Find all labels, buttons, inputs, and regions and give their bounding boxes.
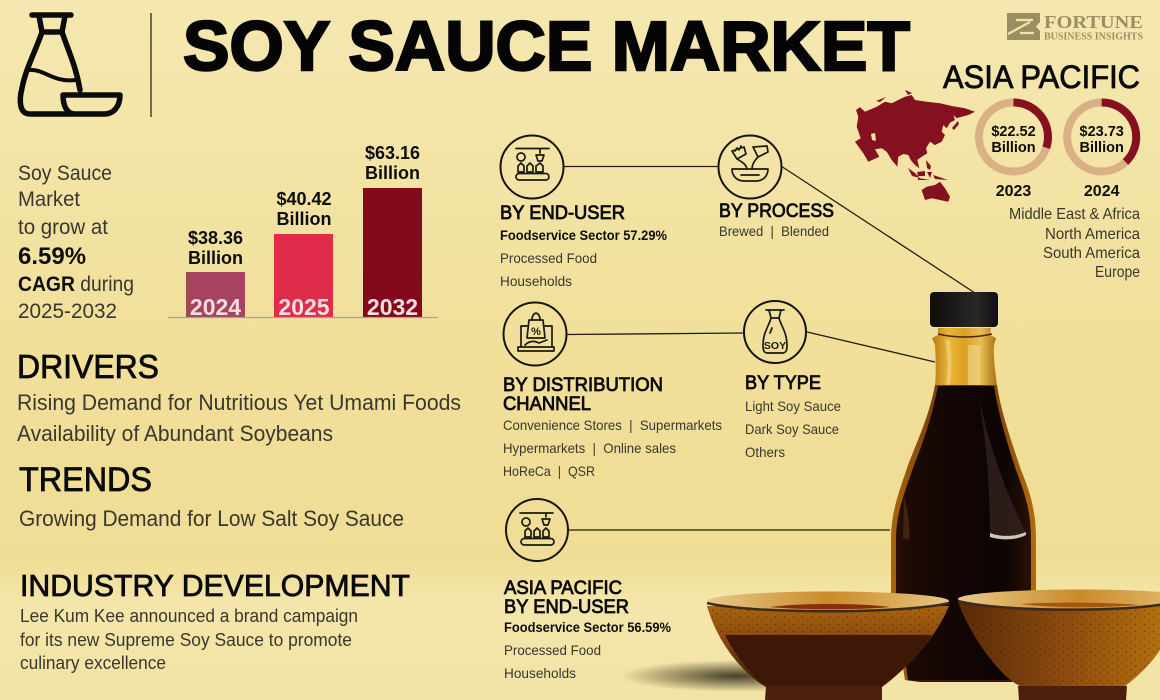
icon: by distribution channel — [504, 302, 566, 366]
block: by end-user: Foodservice Sector 57.29% — [500, 228, 667, 243]
text: other regions: Middle East & Africa — [1009, 206, 1140, 223]
bar chart: market size: Billion — [188, 248, 243, 268]
block: by distribution channel — [503, 374, 722, 479]
bar chart: market size: $38.36 — [188, 228, 243, 248]
icon: by end-user — [500, 136, 564, 198]
icon: by type — [744, 301, 806, 363]
section: trends — [19, 461, 404, 531]
logo: Fortune Business Insights: FORTUNE — [1044, 12, 1143, 32]
bar chart: market size: Billion — [276, 209, 332, 229]
text: market growth: CAGR during — [18, 273, 134, 296]
section: trends: Growing Demand for Low Salt Soy Sauce — [19, 506, 404, 531]
logo: Fortune Business Insights: BUSINESS INSIGHTS — [1044, 32, 1143, 42]
donut: 2023 — [979, 102, 1048, 200]
section: industry development: culinary excellence — [20, 653, 166, 673]
connector lines — [564, 166, 975, 530]
block: by distribution channel: CHANNEL — [503, 393, 591, 415]
bar chart: market size: 2024 — [190, 294, 241, 320]
text: other regions: South America — [1043, 245, 1140, 262]
donut: 2023: Billion — [991, 140, 1036, 156]
donut: 2023: $22.52 — [991, 124, 1036, 140]
block: by type: Dark Soy Sauce — [745, 421, 839, 437]
icon: by distribution channel: % — [531, 326, 541, 338]
soy sauce bottle — [891, 292, 1036, 682]
ground shadow — [620, 660, 850, 692]
block: asia pacific by end-user: BY END-USER — [504, 596, 629, 618]
block: by process — [719, 200, 834, 239]
bar chart: market size: 2032 — [367, 294, 418, 320]
text: other regions: Europe — [1095, 264, 1140, 281]
block: by end-user: BY END-USER — [500, 202, 625, 224]
text: other regions: North America — [1045, 226, 1140, 243]
donut: 2023: 2023 — [996, 183, 1031, 200]
block: by end-user: Households — [500, 273, 572, 289]
donut: 2024 — [1067, 102, 1136, 200]
bar chart: market size: $40.42 — [276, 189, 332, 209]
block: by end-user — [500, 202, 667, 289]
section: drivers — [17, 348, 461, 446]
text: market growth: Market — [18, 188, 80, 211]
section: drivers: Availability of Abundant Soybeans — [17, 421, 333, 446]
icon: by type: SOY — [764, 340, 786, 352]
block: by distribution channel: Convenience Stores | Supermarkets — [503, 417, 722, 433]
text: market growth — [18, 162, 134, 323]
block: asia pacific by end-user: Processed Food — [504, 642, 601, 658]
section: industry development — [20, 568, 410, 673]
block: by end-user: Processed Food — [500, 250, 597, 266]
text: other regions — [1009, 206, 1140, 281]
block: by type — [745, 372, 841, 460]
block: by distribution channel: BY DISTRIBUTION — [503, 374, 663, 396]
block: by process: BY PROCESS — [719, 200, 834, 222]
text: market growth: Soy Sauce — [18, 162, 112, 185]
block: by distribution channel: Hypermarkets | Online sales — [503, 440, 676, 456]
block: by type: BY TYPE — [745, 372, 821, 394]
bar chart: market size: 2025 — [278, 294, 330, 320]
divider — [150, 13, 152, 117]
block: by type: Light Soy Sauce — [745, 398, 841, 414]
heading: Asia Pacific: ASIA PACIFIC — [943, 59, 1140, 95]
title: SOY SAUCE MARKET — [183, 7, 910, 85]
section: trends: TRENDS — [19, 461, 152, 499]
section: drivers: DRIVERS — [17, 348, 159, 385]
text: market growth: 6.59% — [18, 243, 86, 270]
block: asia pacific by end-user — [504, 577, 671, 681]
donut: 2024: 2024 — [1084, 183, 1120, 200]
section: industry development: Lee Kum Kee announced a brand campaign — [20, 606, 358, 626]
logo: Fortune Business Insights — [1007, 12, 1143, 42]
text: market growth: 2025-2032 — [18, 300, 117, 323]
block: asia pacific by end-user: ASIA PACIFIC — [504, 577, 622, 599]
block: asia pacific by end-user: Households — [504, 665, 576, 681]
icon: by process — [718, 136, 782, 198]
bar chart: market size: $63.16 — [365, 143, 420, 163]
donut: 2024: $23.73 — [1080, 124, 1124, 140]
icon: asia pacific by end-user — [506, 499, 568, 561]
text: market growth: to grow at — [18, 216, 108, 239]
section: industry development: for its new Supreme Soy Sauce to promote — [20, 630, 352, 650]
block: by distribution channel: HoReCa | QSR — [503, 463, 595, 479]
block: by type: Others — [745, 444, 785, 460]
block: asia pacific by end-user: Foodservice Sector 56.59% — [504, 620, 671, 635]
bar chart: market size — [168, 143, 438, 320]
block: by process: Brewed | Blended — [719, 223, 829, 239]
soy sauce bowl: left — [707, 592, 949, 700]
section: industry development: INDUSTRY DEVELOPMENT — [20, 568, 410, 603]
soy sauce bowl: right — [958, 590, 1160, 700]
donut: 2024: Billion — [1080, 140, 1124, 156]
icon: soy sauce bottle and dish — [20, 15, 120, 114]
map: Asia Pacific region — [855, 90, 975, 202]
section: drivers: Rising Demand for Nutritious Yet Umami Foods — [17, 390, 461, 415]
bar chart: market size: Billion — [365, 163, 420, 183]
